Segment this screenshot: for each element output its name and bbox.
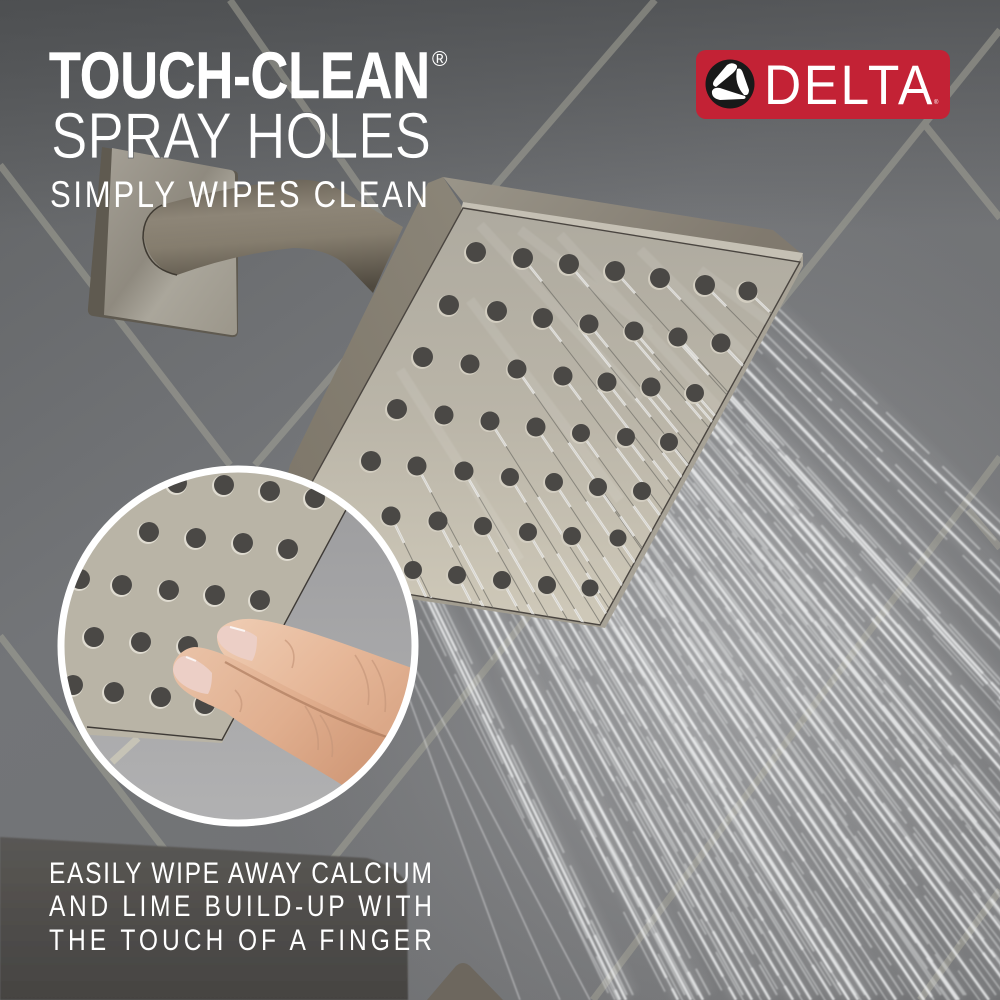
- Delta logo: [696, 50, 950, 119]
- Delta logo: DELTA: [764, 54, 932, 116]
- title: TOUCH-CLEAN: [49, 38, 430, 112]
- Delta logo: ®: [934, 99, 939, 106]
- head face plate: [263, 208, 800, 625]
- inset circle: finger wiping spray holes: [58, 466, 418, 826]
- tagline: SIMPLY WIPES CLEAN: [50, 175, 428, 216]
- description text: [49, 856, 432, 957]
- spray holes: [361, 242, 758, 596]
- description text: AND LIME BUILD-UP WITH: [49, 889, 432, 923]
- brushed streaks and water on face: [394, 254, 772, 624]
- subtitle: spray holes: SPRAY HOLES: [51, 99, 431, 172]
- title: ®: [432, 48, 448, 71]
- head side bands: [263, 177, 803, 628]
- fingers: [173, 619, 420, 790]
- water spray haze: [391, 251, 1000, 1000]
- inset content: [64, 472, 412, 820]
- description text: EASILY WIPE AWAY CALCIUM: [49, 856, 432, 890]
- icon: Delta triangle mark: [706, 60, 754, 108]
- water spray streams: [385, 253, 1000, 1000]
- tub spout shape: [0, 837, 503, 1000]
- shower head: [288, 177, 803, 628]
- inset hole highlights: [61, 473, 325, 716]
- spray hole highlights: [359, 242, 758, 598]
- description text: THE TOUCH OF A FINGER: [49, 923, 432, 957]
- inset white ring: [61, 469, 415, 823]
- inset plate: [64, 472, 346, 743]
- shower arm: [143, 180, 403, 293]
- inset holes: [63, 473, 325, 714]
- shower arm wall plate: [88, 147, 238, 337]
